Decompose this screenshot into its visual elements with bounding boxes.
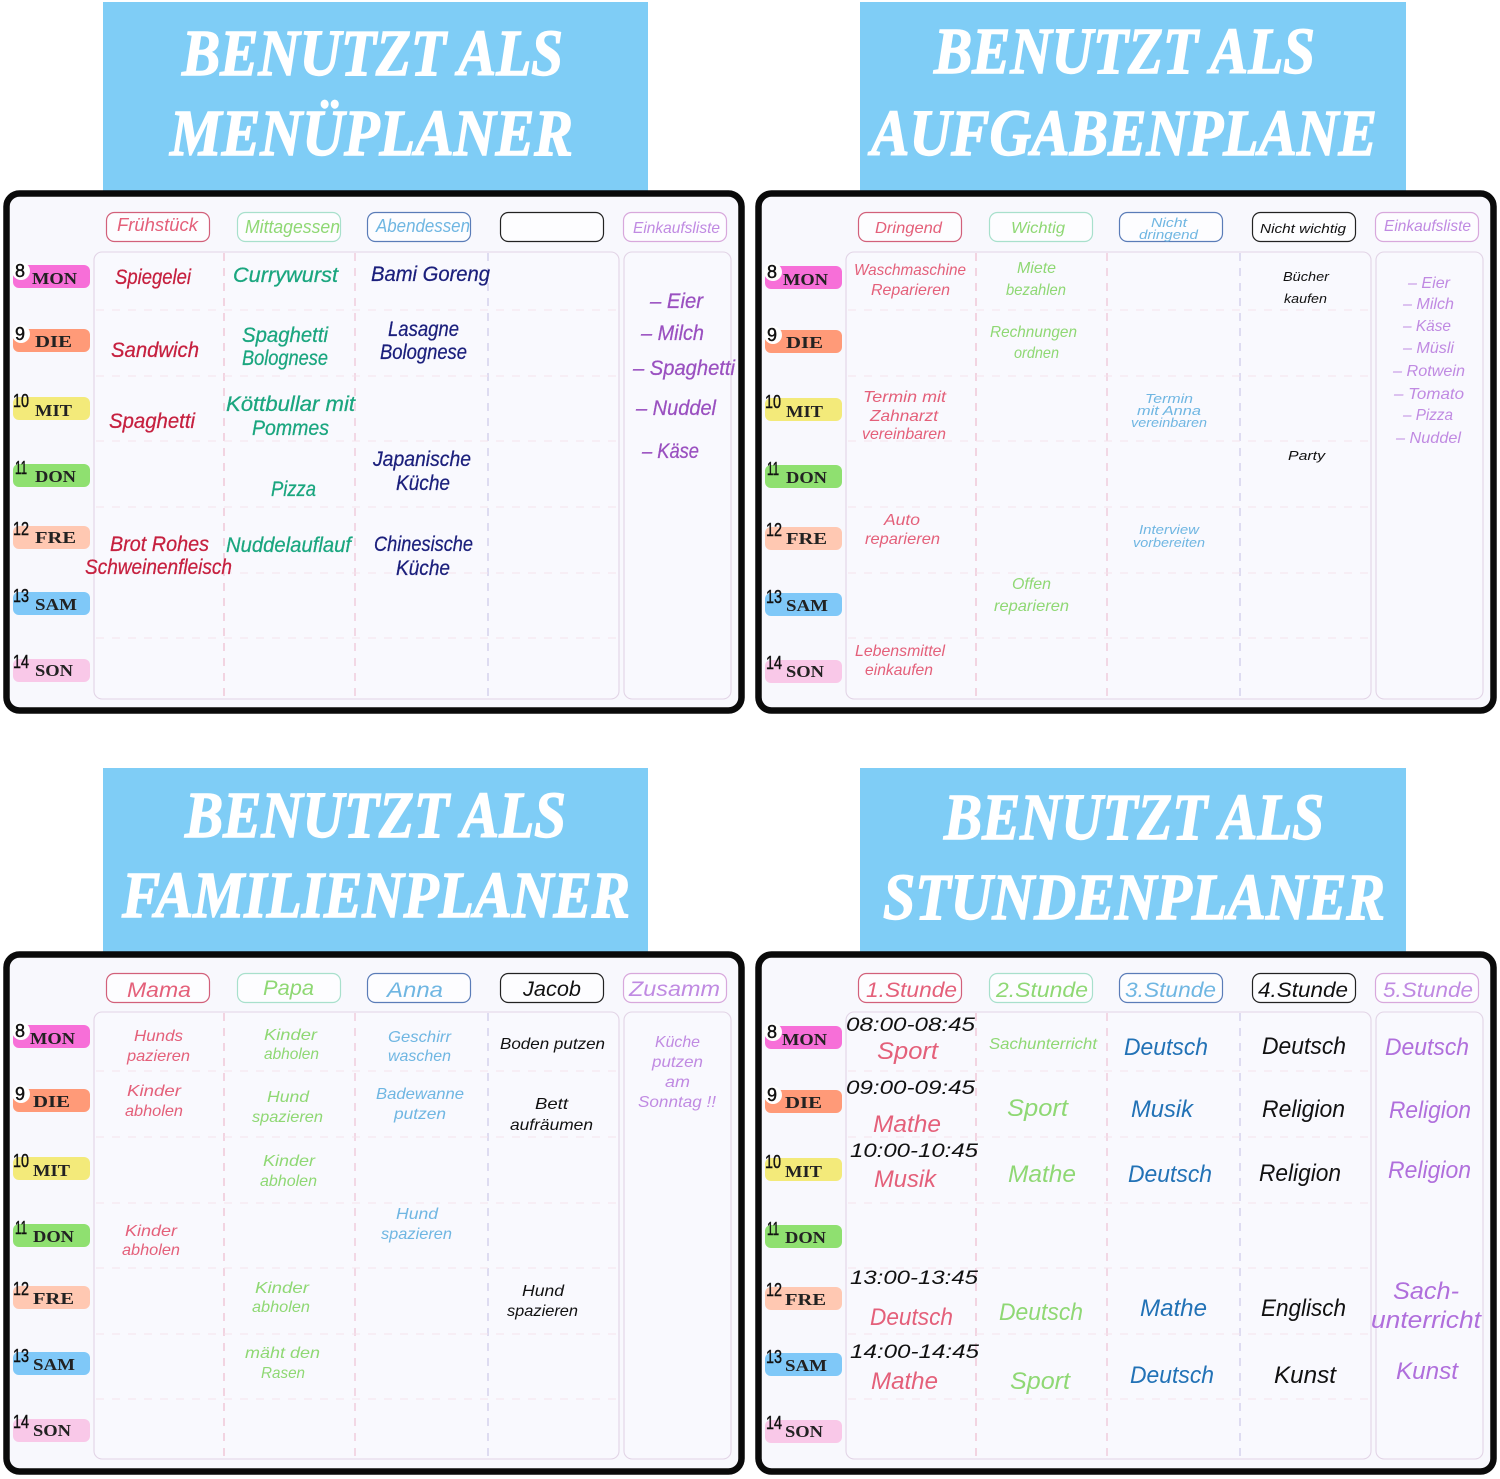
column headings: Anna [385, 979, 443, 1002]
entries: not urgent: vorbereiten [1133, 535, 1205, 550]
entries: lesson 2: Deutsch [999, 1299, 1083, 1326]
entries: important: Miete [1017, 260, 1056, 277]
entries: dinner: Bami Goreng [371, 263, 490, 286]
entries: lesson 2: Sachunterricht [989, 1036, 1098, 1053]
weekday labels: DIE [35, 332, 72, 351]
entries: breakfast: Brot Rohes [110, 533, 209, 556]
entries: Jacob: Bett [535, 1096, 569, 1113]
entries: lunch: Spaghetti [242, 324, 329, 347]
entries: lunch: Nuddelauflauf [226, 534, 353, 557]
weekday labels: SON [786, 662, 824, 681]
weekday labels: 11 [15, 1218, 27, 1238]
entries: not urgent: mit Anna [1137, 403, 1201, 418]
entries: Papa: abholen [260, 1173, 317, 1190]
entries: lunch [226, 264, 356, 557]
weekday labels: 10 [765, 392, 781, 412]
weekday labels: 11 [767, 1219, 779, 1239]
weekday labels [764, 1022, 842, 1443]
weekday labels: DON [33, 1227, 74, 1246]
weekday labels: SON [35, 661, 73, 680]
weekday labels: 10 [13, 1151, 29, 1171]
column headings: 5.Stunde [1383, 979, 1473, 1002]
entries: shopping list: – Rotwein [1392, 363, 1465, 380]
entries: Jacob [500, 1036, 605, 1320]
entries: Mama: pazieren [126, 1048, 190, 1065]
weekday labels: 13 [766, 587, 782, 607]
entries: shopping list: – Müsli [1402, 340, 1454, 357]
column headings: Frühstück [117, 215, 199, 235]
weekday labels [764, 262, 842, 683]
entries: lesson 3: Deutsch [1130, 1362, 1214, 1389]
column header boxes [858, 974, 1478, 1002]
lesson times: 08:00-08:45 [846, 1015, 976, 1036]
entries: shopping list: – Milch [1402, 296, 1454, 313]
schedule grid [846, 252, 1371, 699]
column headings [875, 215, 1471, 242]
entries: Papa [245, 1027, 323, 1382]
column headings [127, 977, 720, 1002]
entries: lesson 5: Religion [1388, 1157, 1471, 1184]
entries: not important: kaufen [1284, 291, 1327, 306]
entries: Anna: putzen [393, 1106, 446, 1123]
entries: lesson 4: Englisch [1261, 1295, 1346, 1322]
entries: lesson 5: Sach- [1393, 1278, 1459, 1305]
weekday labels: 11 [767, 459, 779, 479]
weekday labels: MIT [785, 1162, 822, 1181]
entries: shopping list: – Käse [641, 440, 699, 463]
weekday labels: SON [785, 1422, 823, 1441]
weekday labels: 10 [765, 1152, 781, 1172]
column headings: Zusamm [628, 978, 720, 1001]
entries: dinner: Küche [396, 472, 450, 495]
entries: shopping list: – Tomato [1393, 386, 1464, 403]
entries: important: bezahlen [1006, 282, 1066, 299]
entries: shopping list: – Nuddel [1395, 430, 1461, 447]
entries: Papa: Rasen [261, 1365, 305, 1382]
weekday labels: DON [786, 468, 827, 487]
weekday labels: 14 [766, 1413, 782, 1433]
weekday labels: 13 [13, 1346, 29, 1366]
entries: lesson 3: Mathe [1140, 1295, 1207, 1322]
board: Aufgabenplaner [758, 194, 1494, 710]
column headings [866, 979, 1473, 1002]
banner: Familienplaner: BENUTZT ALS [184, 779, 566, 852]
weekday labels: FRE [35, 528, 76, 547]
entries: together [638, 1034, 717, 1111]
banner: Menüplaner [103, 2, 648, 192]
weekday labels: MON [32, 269, 77, 288]
column header boxes [858, 212, 1478, 242]
entries: not important: Bücher [1283, 269, 1330, 284]
entries: lesson 3: Deutsch [1128, 1161, 1212, 1188]
entries: shopping list: – Eier [649, 290, 704, 313]
weekday labels: SAM [786, 596, 828, 615]
entries: not urgent [1131, 391, 1207, 550]
entries: lesson 2: Sport [1007, 1095, 1069, 1122]
board: Stundenplaner [758, 954, 1494, 1472]
entries: not important: Party [1288, 448, 1327, 463]
column headings: 4.Stunde [1258, 979, 1348, 1002]
entries: Mama: Kinder [127, 1083, 182, 1100]
weekday labels: 13 [766, 1347, 782, 1367]
weekday labels: 8 [767, 1022, 777, 1042]
entries: Papa: mäht den [245, 1345, 320, 1362]
entries: urgent [854, 262, 966, 679]
entries: shopping list: – Milch [640, 322, 704, 345]
entries: breakfast: Spiegelei [115, 266, 192, 289]
weekday labels: 9 [767, 1085, 777, 1105]
banner: Stundenplaner [860, 768, 1406, 953]
board: Menüplaner [6, 194, 742, 710]
entries: Anna: waschen [388, 1048, 451, 1065]
banner: Menüplaner: MENÜPLANER [169, 97, 573, 170]
entries: lesson 4: Religion [1259, 1160, 1341, 1187]
weekday labels: 12 [13, 519, 29, 539]
lesson times: 09:00-09:45 [846, 1078, 976, 1099]
entries: lesson 5 [1371, 1034, 1482, 1385]
column headings [117, 215, 720, 237]
entries: Papa: Hund [267, 1089, 310, 1106]
entries: shopping list: – Eier [1407, 275, 1451, 292]
entries: dinner: Bolognese [380, 341, 467, 364]
entries: shopping list [632, 290, 736, 463]
entries: lunch: Currywurst [233, 264, 339, 287]
entries: lesson 3: Deutsch [1124, 1034, 1208, 1061]
entries: Papa: abholen [264, 1046, 319, 1063]
shopping list panel [624, 252, 731, 699]
weekday labels: DIE [33, 1092, 70, 1111]
column headings: 1.Stunde [866, 979, 957, 1002]
weekday labels: 8 [15, 1021, 25, 1041]
entries: lesson 5: Deutsch [1385, 1034, 1469, 1061]
entries: urgent: Lebensmittel [855, 643, 945, 660]
column headings: Papa [263, 977, 314, 1000]
banner: Menüplaner: BENUTZT ALS [181, 17, 563, 90]
fifth lesson panel [1376, 1012, 1483, 1459]
weekday labels: FRE [785, 1290, 826, 1309]
entries: urgent: Reparieren [871, 282, 950, 299]
entries: dinner: Japanische [372, 448, 471, 471]
weekday labels: 11 [15, 458, 27, 478]
entries: lesson 4: Kunst [1274, 1362, 1337, 1389]
entries: lesson 4: Deutsch [1262, 1033, 1346, 1060]
entries: lesson 1: Sport [877, 1038, 939, 1065]
column headings: Nicht wichtig [1260, 221, 1347, 236]
shopping list panel [1376, 252, 1483, 699]
weekday labels: 12 [766, 520, 782, 540]
entries: Anna: Hund [396, 1206, 439, 1223]
entries: lesson 1: Musik [874, 1166, 938, 1193]
entries: lesson 2: Mathe [1008, 1161, 1076, 1188]
weekday labels: 12 [766, 1280, 782, 1300]
column headings: Mama [127, 979, 191, 1002]
column header boxes [106, 974, 726, 1002]
banner: Aufgabenplane: BENUTZT ALS [933, 15, 1315, 88]
column headings: Dringend [875, 220, 943, 237]
entries: lesson 3 [1124, 1034, 1214, 1389]
weekday labels: FRE [786, 529, 827, 548]
weekday labels: 8 [15, 261, 25, 281]
entries: Mama: Hunds [134, 1028, 183, 1045]
schedule grid [846, 1012, 1371, 1459]
entries: dinner: Küche [396, 557, 450, 580]
entries: Mama [122, 1028, 190, 1259]
entries: important: reparieren [994, 598, 1069, 615]
entries: dinner: Chinesische [374, 533, 473, 556]
weekday labels: MIT [33, 1161, 70, 1180]
banner: Aufgabenplane: AUFGABENPLANE [868, 97, 1377, 170]
banner: Stundenplaner: STUNDENPLANER [883, 861, 1385, 934]
weekday labels [12, 1021, 90, 1442]
entries: Papa: abholen [252, 1299, 310, 1316]
entries: lesson 1: Mathe [873, 1111, 941, 1138]
entries: breakfast [85, 266, 232, 579]
entries: shopping list [1392, 275, 1465, 447]
weekday labels: DON [785, 1228, 826, 1247]
column header boxes [106, 212, 726, 242]
column headings: 3.Stunde [1125, 979, 1216, 1002]
entries: lunch: Köttbullar mit [226, 393, 356, 416]
weekday labels: MON [783, 270, 828, 289]
weekday labels: FRE [33, 1289, 74, 1308]
lesson times: 14:00-14:45 [850, 1342, 980, 1363]
weekday labels: 14 [766, 653, 782, 673]
schedule grid [94, 1012, 619, 1459]
entries: together: am [665, 1074, 690, 1091]
column headings: Mittagessen [245, 217, 340, 237]
weekday labels: SAM [35, 595, 77, 614]
weekday labels: MON [782, 1030, 827, 1049]
weekday labels: 10 [13, 391, 29, 411]
column headings: Wichtig [1011, 220, 1065, 237]
schedule grid [94, 252, 619, 699]
entries: not important [1283, 269, 1330, 463]
weekday labels: DIE [786, 333, 823, 352]
entries: Anna: Geschirr [388, 1029, 452, 1046]
entries: Anna: spazieren [381, 1226, 452, 1243]
weekday labels: 8 [767, 262, 777, 282]
column headings: Jacob [522, 978, 581, 1001]
column headings: Nicht [1151, 215, 1189, 230]
lesson times: 10:00-10:45 [850, 1141, 979, 1162]
weekday labels: 9 [767, 325, 777, 345]
entries: shopping list: – Käse [1402, 318, 1451, 335]
entries: lunch: Pizza [271, 478, 316, 501]
entries: lesson 3: Musik [1131, 1096, 1195, 1123]
entries: lesson 4: Religion [1262, 1096, 1345, 1123]
entries: Jacob: spazieren [507, 1303, 578, 1320]
entries: urgent: reparieren [865, 531, 940, 548]
entries: Jacob: aufräumen [510, 1117, 593, 1134]
entries: lesson 5: Religion [1389, 1097, 1471, 1124]
entries: urgent: vereinbaren [862, 426, 946, 443]
entries: lesson 4 [1259, 1033, 1346, 1389]
entries: Mama: abholen [122, 1242, 180, 1259]
weekday labels: SON [33, 1421, 71, 1440]
entries: Papa: Kinder [255, 1280, 310, 1297]
entries: urgent: einkaufen [865, 662, 933, 679]
entries: Jacob: Boden putzen [500, 1036, 605, 1053]
weekday labels: 14 [13, 652, 29, 672]
entries: lesson 1: Deutsch [870, 1304, 953, 1331]
entries: Anna: Badewanne [376, 1086, 464, 1103]
entries: breakfast: Schweinenfleisch [85, 556, 232, 579]
entries: Papa: spazieren [252, 1109, 323, 1126]
weekday labels: SAM [785, 1356, 827, 1375]
entries: shopping list: – Nuddel [635, 397, 717, 420]
weekday labels: 13 [13, 586, 29, 606]
lesson times [846, 1015, 980, 1363]
entries: lesson 5: unterricht [1371, 1307, 1482, 1334]
entries: urgent: Zahnarzt [869, 408, 939, 425]
column headings: Einkaufsliste [1384, 218, 1471, 235]
entries: lesson 2 [989, 1036, 1098, 1395]
entries: breakfast: Sandwich [111, 339, 199, 362]
lesson times: 13:00-13:45 [850, 1268, 979, 1289]
entries: lunch: Bolognese [242, 347, 328, 370]
entries: not urgent: vereinbaren [1131, 415, 1207, 430]
entries: dinner [371, 263, 490, 580]
entries: together: Sonntag !! [638, 1094, 717, 1111]
weekday labels: 12 [13, 1279, 29, 1299]
entries: lesson 1: Mathe [871, 1368, 938, 1395]
entries: Papa: Kinder [263, 1153, 316, 1170]
entries: shopping list: – Spaghetti [632, 357, 736, 380]
entries: shopping list: – Pizza [1402, 407, 1453, 424]
entries: Mama: abholen [125, 1103, 183, 1120]
weekday labels: DON [35, 467, 76, 486]
column headings: 2.Stunde [995, 979, 1088, 1002]
entries: not urgent: Interview [1139, 522, 1201, 537]
entries: urgent: Waschmaschine [854, 262, 966, 279]
entries: Mama: Kinder [125, 1223, 178, 1240]
column headings: Abendessen [375, 216, 470, 236]
weekday labels: MIT [35, 401, 72, 420]
weekday labels: 9 [15, 324, 25, 344]
entries: together: Küche [655, 1034, 700, 1051]
entries: Papa: Kinder [264, 1027, 318, 1044]
notes panel [624, 1012, 731, 1459]
entries: dinner: Lasagne [388, 318, 459, 341]
banner: Familienplaner [103, 768, 648, 953]
entries: urgent: Auto [883, 512, 920, 529]
weekday labels [12, 261, 90, 682]
entries: not urgent: Termin [1145, 391, 1193, 406]
entries: lesson 1 [870, 1038, 953, 1395]
banner: Familienplaner: FAMILIENPLANER [121, 859, 630, 932]
column headings: Einkaufsliste [633, 220, 720, 237]
entries: important: ordnen [1014, 345, 1059, 362]
entries: important: Offen [1012, 576, 1051, 593]
weekday labels: MIT [786, 402, 823, 421]
weekday labels: 14 [13, 1412, 29, 1432]
board: Familienplaner [6, 954, 742, 1472]
banner: Aufgabenplane [860, 2, 1406, 192]
entries: urgent: Termin mit [863, 389, 947, 406]
entries: Anna [376, 1029, 464, 1243]
banner: Stundenplaner: BENUTZT ALS [943, 781, 1324, 854]
weekday labels: DIE [785, 1093, 822, 1112]
entries: lunch: Pommes [252, 417, 329, 440]
entries: lesson 5: Kunst [1396, 1358, 1459, 1385]
weekday labels: SAM [33, 1355, 75, 1374]
entries: lesson 2: Sport [1010, 1368, 1071, 1395]
entries: together: putzen [651, 1054, 703, 1071]
weekday labels: 9 [15, 1084, 25, 1104]
entries: important: Rechnungen [990, 324, 1077, 341]
weekday labels: MON [30, 1029, 75, 1048]
entries: Jacob: Hund [522, 1283, 565, 1300]
column headings: dringend [1139, 227, 1199, 242]
entries: important [990, 260, 1077, 615]
entries: breakfast: Spaghetti [109, 410, 196, 433]
